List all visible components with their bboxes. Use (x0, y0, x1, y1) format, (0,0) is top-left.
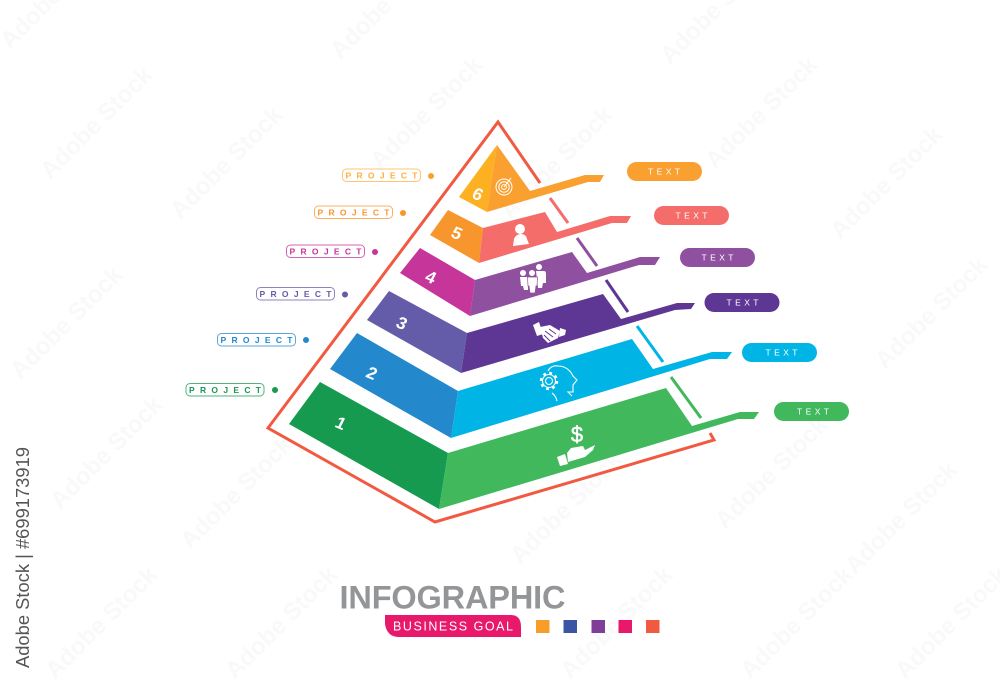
text pill 5 (654, 206, 729, 225)
project label 2: PROJECT (220, 335, 293, 345)
text: Adobe Stock (220, 561, 343, 682)
text: Adobe Stock (825, 121, 948, 244)
text: Adobe Stock (5, 261, 128, 384)
text: Adobe Stock (555, 561, 678, 682)
icon: person (513, 224, 529, 246)
project label 4 (286, 245, 378, 258)
text: Adobe Stock (40, 561, 163, 682)
level 5 block: orange and coral (430, 198, 631, 263)
text: Adobe Stock (505, 446, 628, 569)
level 3 block: indigo (367, 280, 695, 373)
stock credit text: Adobe Stock | #699173919 (13, 447, 33, 668)
text pill 3 (704, 293, 780, 312)
text pill 1 (774, 402, 849, 421)
text pill 1: TEXT (797, 406, 829, 416)
project label 5 (314, 206, 406, 218)
badge: business goal: BUSINESS GOAL (393, 620, 513, 634)
text pill 2 (742, 343, 817, 362)
text: Adobe Stock (165, 101, 288, 224)
level 1 block: green (289, 377, 759, 509)
text: Adobe Stock (710, 411, 833, 534)
icon: head with gear (541, 366, 577, 401)
number 3: 3 (393, 312, 411, 334)
icon: hand holding dollar (557, 422, 595, 466)
pyramid outline (268, 122, 714, 522)
number 5: 5 (448, 222, 466, 244)
icon: team of three people (520, 264, 546, 293)
text pill 6 (627, 162, 702, 181)
text pill 3: TEXT (726, 298, 758, 308)
number 2: 2 (363, 362, 381, 384)
text: Adobe Stock (840, 456, 963, 579)
text pill 4 (680, 248, 755, 267)
text pill 6: TEXT (648, 166, 680, 176)
text: Adobe Stock (35, 61, 158, 184)
project label 1 (186, 384, 278, 396)
project label 3: PROJECT (260, 289, 332, 299)
text: Adobe Stock (45, 391, 168, 514)
title: INFOGRAPHIC (340, 580, 566, 616)
colour squares (536, 620, 660, 633)
level 6 block: pyramid top (459, 145, 604, 212)
icon: hand holding dollar: $ (571, 422, 583, 447)
text pill 2: TEXT (766, 348, 798, 358)
text: Adobe Stock (870, 251, 993, 374)
text: Adobe Stock (175, 431, 298, 554)
project label 4: PROJECT (290, 246, 362, 256)
text: Adobe Stock (495, 101, 618, 224)
number 4: 4 (422, 266, 440, 288)
project label 2 (218, 334, 309, 346)
text: Adobe Stock (365, 51, 488, 174)
project label 6 (342, 169, 434, 182)
text pill 5: TEXT (676, 210, 708, 220)
project label 6: PROJECT (346, 170, 418, 180)
project label 3 (256, 288, 348, 300)
text: Adobe Stock (735, 561, 858, 682)
icon: handshake (533, 322, 566, 343)
level 2 block: blue (330, 326, 732, 438)
level 4 block: magenta and purple (400, 238, 660, 316)
text pill 4: TEXT (702, 252, 734, 262)
icon: target (496, 178, 512, 195)
number 1: 1 (332, 412, 350, 434)
badge: business goal (385, 615, 521, 637)
number 6: 6 (469, 183, 487, 205)
project label 5: PROJECT (318, 207, 390, 217)
text: Adobe Stock (700, 51, 823, 174)
project label 1: PROJECT (189, 385, 262, 395)
